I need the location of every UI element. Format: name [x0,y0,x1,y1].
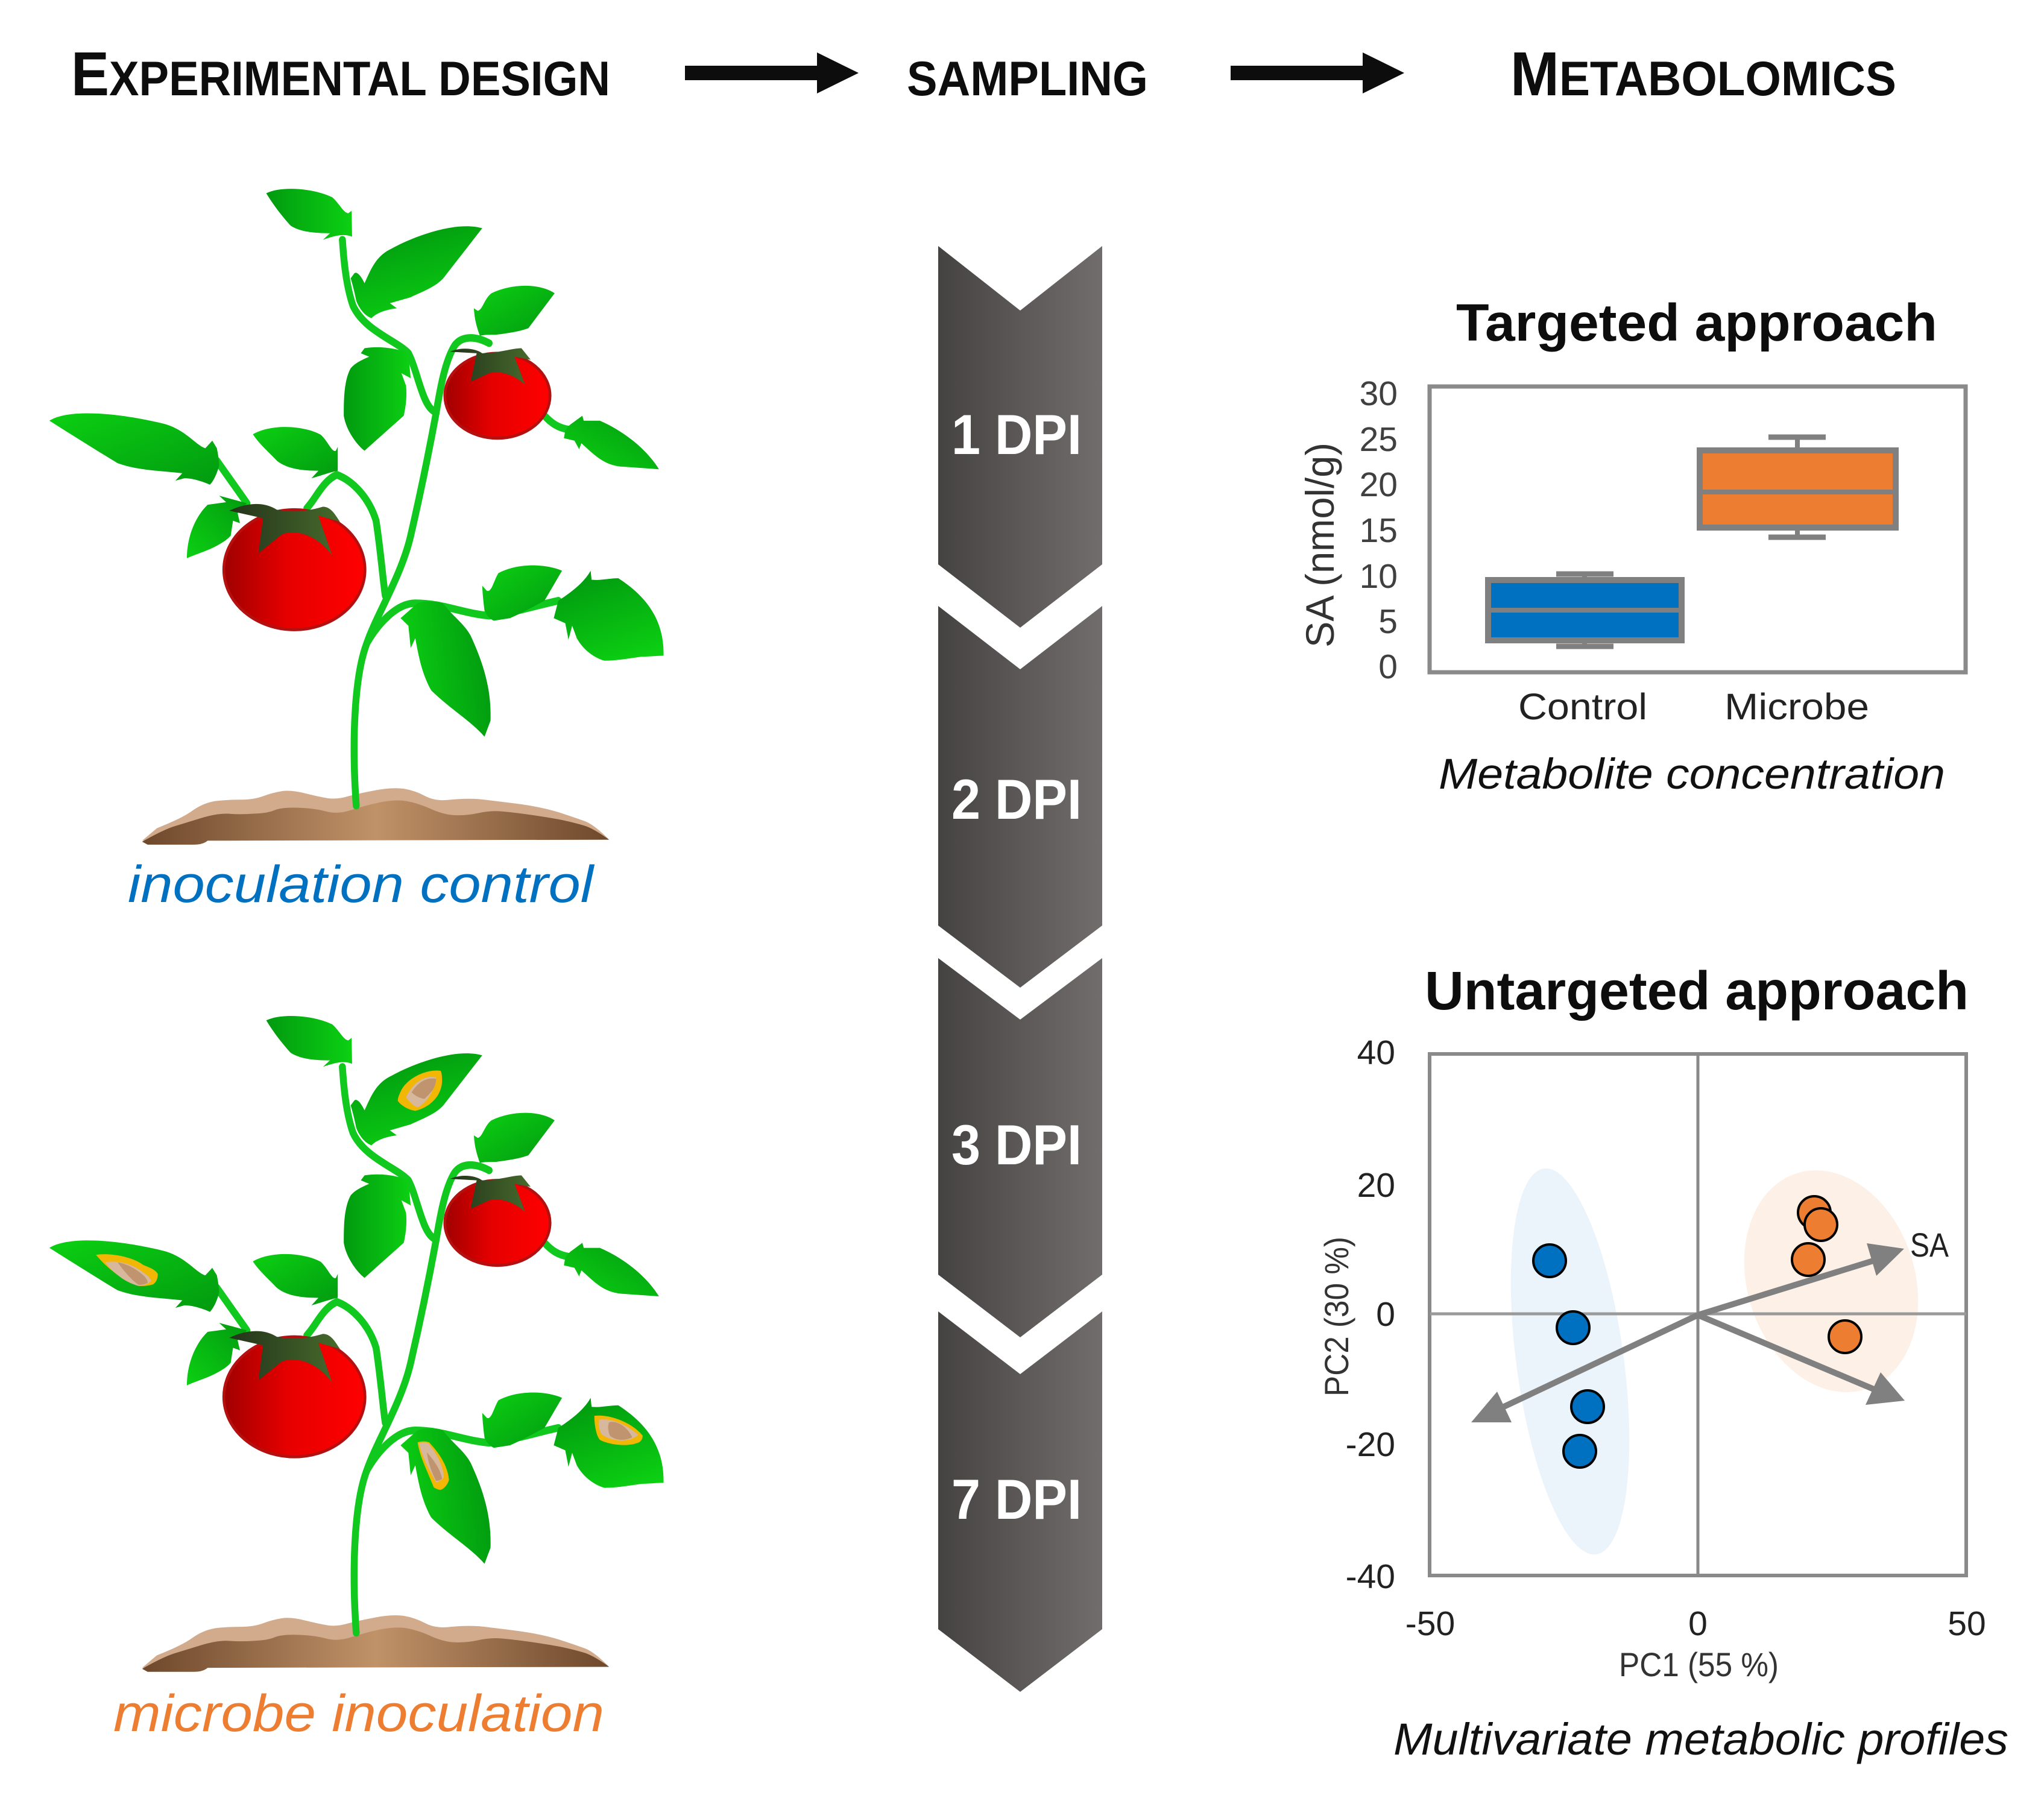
y axis ticks: 5 [1378,602,1398,641]
microbe sample points [1792,1196,1861,1353]
category label: control: Control [1518,686,1647,727]
chevron: 2 DPI [938,606,1102,988]
disease lesions on leaves [96,1071,643,1490]
category label: microbe: Microbe [1724,686,1869,727]
large tomato [224,504,365,629]
chevron: 3 DPI [938,958,1102,1337]
arrow: loading lower right [1698,1315,1905,1405]
y axis ticks: 10 [1360,557,1398,596]
y axis ticks [1360,374,1398,686]
small tomato [445,349,550,438]
x axis ticks: 0 [1688,1604,1708,1643]
PCA biplot [1317,1033,1986,1683]
soil mound [142,788,609,845]
caption: multivariate metabolic profiles: Multivariate metabolic profiles [1393,1714,2008,1764]
arrow: loading lower left [1471,1315,1698,1422]
stems [217,240,570,806]
chevron: 2 DPI: 2 DPI [951,768,1082,831]
plot frame and axes [1430,1054,1966,1575]
heading: sampling: SAMPLING [907,52,1148,106]
arrow: loading SA [1698,1243,1904,1315]
x axis ticks: 50 [1948,1604,1986,1643]
x axis ticks [1405,1604,1986,1643]
x axis title: PC1 (55 %) [1619,1645,1779,1683]
chevron: 3 DPI: 3 DPI [951,1113,1082,1176]
leaves [49,189,664,737]
y axis ticks: 40 [1357,1033,1395,1072]
box plot: SA concentration [1298,374,1966,727]
y axis ticks: 20 [1357,1166,1395,1205]
y axis ticks: 20 [1360,465,1398,504]
arrow: design to sampling [685,52,859,93]
chevron: 1 DPI: 1 DPI [951,403,1082,466]
heading: experimental design: EXPERIMENTAL DESIGN [71,39,610,109]
chevron: 7 DPI [938,1311,1102,1692]
y axis title: PC2 (30 %) [1317,1237,1355,1396]
caption: metabolite concentration: Metabolite concentration [1439,751,1945,798]
arrow: sampling to metabolomics [1231,52,1404,93]
cluster ellipse: control [1491,1161,1649,1562]
axis redrawn over clusters [1430,1312,1966,1316]
y axis ticks: 15 [1360,511,1398,550]
caption: microbe inoculation: microbe inoculation [113,1685,604,1743]
y axis ticks: 25 [1360,420,1398,459]
box: microbe [1700,437,1896,537]
y axis ticks: -20 [1346,1425,1395,1464]
y axis label: SA (nmol/g) [1298,443,1342,648]
x axis ticks: -50 [1405,1604,1455,1643]
y axis ticks: 0 [1378,648,1398,686]
cluster ellipse: microbe [1717,1148,1946,1415]
y axis ticks: -40 [1346,1557,1395,1596]
y axis ticks [1346,1033,1395,1596]
chevron: 7 DPI: 7 DPI [951,1468,1082,1531]
heading: targeted approach: Targeted approach [1456,294,1937,352]
illustration: microbe-inoculated tomato plant [49,1016,664,1672]
sampling timeline chevrons [938,246,1102,1692]
heading: untargeted approach: Untargeted approach [1425,961,1969,1021]
caption: inoculation control: inoculation control [128,856,595,913]
label: SA: SA [1910,1226,1949,1264]
heading: metabolomics: METABOLOMICS [1510,39,1896,109]
chevron: 1 DPI [938,246,1102,628]
illustration: control tomato plant [49,189,664,845]
plot frame [1430,386,1966,672]
box: control [1488,574,1682,646]
y axis ticks: 0 [1376,1295,1395,1334]
control sample points [1533,1244,1604,1468]
y axis ticks: 30 [1360,374,1398,413]
